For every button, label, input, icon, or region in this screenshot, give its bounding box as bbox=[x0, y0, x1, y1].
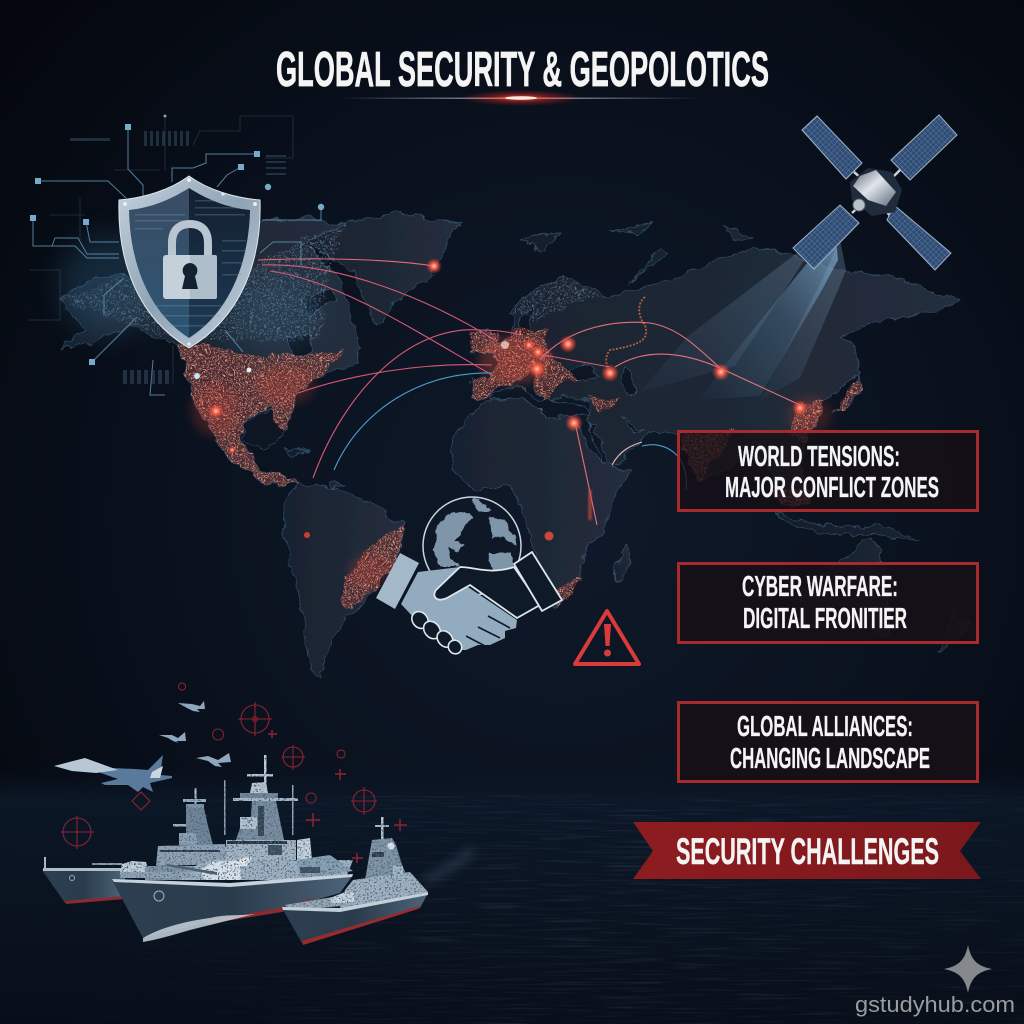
ship: bridge tower bbox=[236, 801, 284, 840]
circuit: node terminals bbox=[30, 114, 324, 379]
map: united kingdom bbox=[470, 328, 497, 352]
map: caribbean bbox=[285, 447, 345, 488]
icon: padlock bbox=[163, 224, 217, 299]
text: cyber warfare: CYBER WARFARE: bbox=[742, 571, 898, 603]
satellite beam bbox=[640, 214, 848, 400]
ship: main deck block bbox=[226, 840, 296, 862]
satellite: solar panels bbox=[793, 115, 957, 270]
text: cyber warfare bbox=[742, 571, 907, 635]
map: japan bbox=[832, 375, 862, 412]
map: border glow line russia bbox=[606, 297, 646, 372]
ship: rear left vessel bbox=[42, 857, 125, 904]
shield: digital texture bbox=[135, 200, 246, 326]
text: world tensions: WORLD TENSIONS: bbox=[738, 441, 900, 473]
icon: handshake over globe bbox=[376, 497, 562, 657]
map: inland seas bbox=[243, 288, 645, 463]
map: australia bbox=[800, 539, 890, 637]
map: north america bbox=[60, 218, 358, 486]
panel: global alliances bbox=[678, 702, 978, 782]
map: city lights bbox=[170, 330, 890, 620]
panel: cyber warfare bbox=[678, 564, 978, 642]
sea surface bbox=[0, 770, 1024, 1024]
map: new zealand bbox=[938, 612, 970, 654]
shield: rivets bbox=[123, 178, 257, 346]
banner: security challenges bbox=[633, 822, 981, 879]
jet: small fighter 1 bbox=[178, 701, 205, 712]
ship: rear deck fittings bbox=[120, 872, 190, 878]
ship: white housing bbox=[297, 838, 312, 860]
map: eurasia bbox=[472, 247, 962, 505]
map: regional glows bbox=[60, 235, 832, 586]
icon: shield with padlock bbox=[119, 176, 260, 348]
connection arcs bbox=[258, 259, 800, 525]
ship: bow wave bbox=[143, 914, 255, 942]
ship: wake foam bbox=[425, 850, 472, 880]
map: south america bbox=[283, 482, 405, 678]
map: svalbard and arctic islands bbox=[522, 222, 755, 285]
handshake: globe bbox=[423, 497, 521, 595]
warships bbox=[42, 755, 472, 945]
text: world tensions bbox=[725, 441, 939, 504]
map: blue coast speckle bbox=[60, 225, 602, 342]
jet: small fighter 3 bbox=[196, 753, 231, 767]
map: madagascar bbox=[614, 545, 632, 580]
text: cyber warfare: DIGITAL FRONITIER bbox=[743, 603, 907, 635]
title underline flare bbox=[340, 90, 700, 106]
shield: left inner panel bbox=[129, 188, 189, 338]
map: world land masses bbox=[50, 212, 970, 678]
circuit: data bars bbox=[70, 131, 286, 384]
satellite: panel cell grids bbox=[793, 115, 957, 270]
ship: radar platform bbox=[233, 798, 298, 801]
map: greenland bbox=[310, 212, 460, 322]
ship: mid vessel superstructure bbox=[92, 788, 230, 880]
text: global alliances bbox=[730, 711, 930, 775]
icon: warning triangle bbox=[575, 611, 639, 664]
fighter jets bbox=[54, 701, 231, 792]
handshake: left hand and cuff bbox=[376, 553, 517, 657]
shield: metal frame bbox=[119, 176, 260, 348]
jet: small fighter 2 bbox=[159, 732, 186, 743]
icon: sparkle bbox=[944, 945, 992, 993]
handshake: right hand and cuff bbox=[434, 552, 562, 618]
map: indonesia bbox=[773, 512, 920, 540]
icon: satellite bbox=[793, 115, 957, 270]
ship: main hull bbox=[112, 874, 353, 938]
shield: right inner panel bbox=[189, 188, 250, 338]
handshake: finger lines bbox=[466, 616, 510, 646]
ship: main vessel bbox=[120, 755, 353, 880]
watermark text: gstudyhub.com bbox=[855, 992, 1015, 1017]
targeting reticles bbox=[61, 683, 407, 863]
cyber circuit network bbox=[28, 114, 324, 395]
satellite: struts bbox=[852, 170, 900, 218]
ship: mast bbox=[264, 755, 266, 785]
jet: large fighter bbox=[54, 755, 172, 792]
ship: gun turret bbox=[200, 860, 241, 880]
satellite: body bbox=[850, 168, 902, 216]
ship: right vessel bbox=[282, 817, 428, 945]
conflict hotspots bbox=[208, 258, 808, 540]
map: africa bbox=[450, 397, 633, 606]
panel: world tensions bbox=[678, 432, 978, 510]
